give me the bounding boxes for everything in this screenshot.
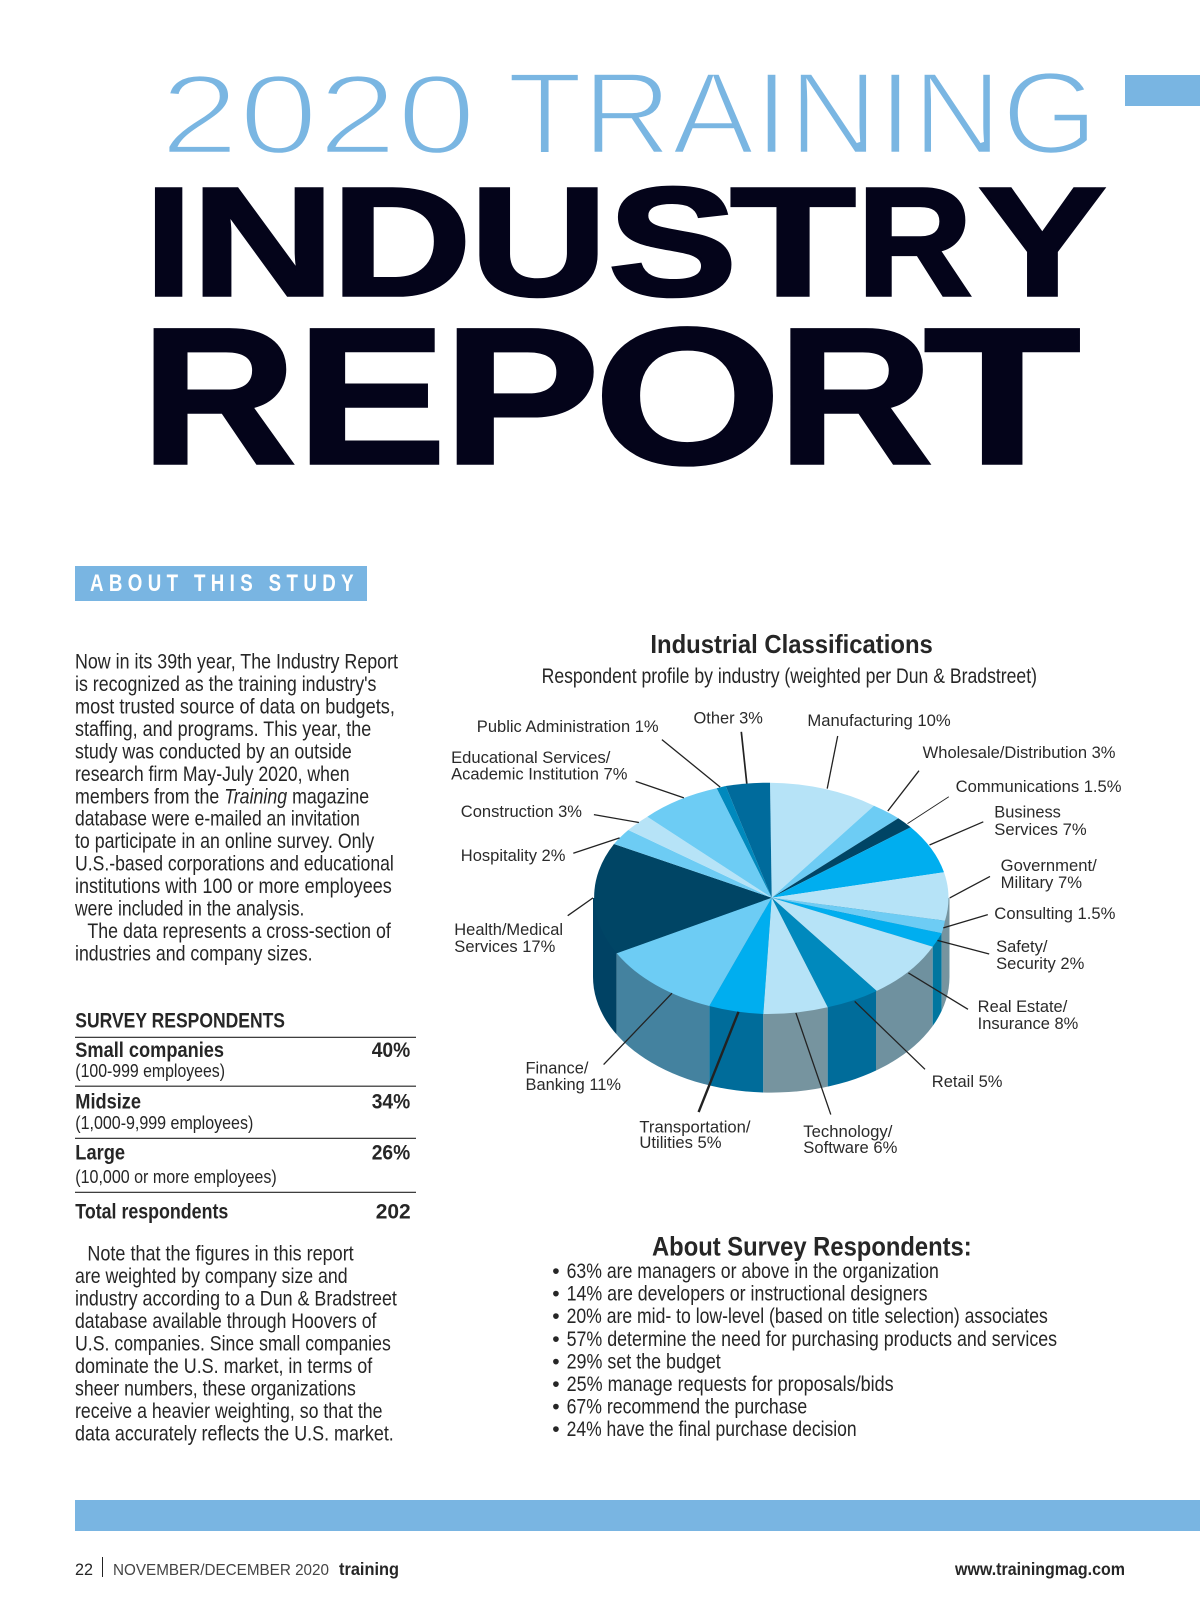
footer: page number, date and magazine name: 22 xyxy=(75,1560,93,1579)
title: Report: O xyxy=(594,288,782,506)
footer: page number, date and magazine name: training xyxy=(339,1559,399,1579)
slice labels: Communications 1.5% xyxy=(956,778,1122,796)
text block: study introduction xyxy=(74,650,398,966)
heading: About Survey Respondents: About Survey Respondents: xyxy=(652,1232,972,1262)
title: Report: R xyxy=(777,288,933,506)
slice labels: Educational Services/ xyxy=(451,749,611,767)
slice labels: Government/ xyxy=(1001,857,1097,875)
text block: study introduction: most trusted source of data on budgets, xyxy=(75,695,395,718)
bullet list: respondent facts: 57% determine the need for purchasing products and services xyxy=(567,1328,1057,1351)
slice labels: Finance/ xyxy=(526,1060,589,1078)
table heading: SURVEY RESPONDENTS xyxy=(75,1010,285,1032)
title: Report: R xyxy=(140,288,297,506)
title: Report: P xyxy=(442,288,600,506)
bullet list: respondent facts: • xyxy=(552,1283,560,1306)
footer: website: www.trainingmag.com xyxy=(954,1559,1125,1579)
slice labels: Banking 11% xyxy=(526,1076,621,1094)
title: Industry: Y xyxy=(978,154,1107,328)
slice labels: Construction 3% xyxy=(461,803,582,821)
row: large: (10,000 or more employees) xyxy=(75,1167,277,1187)
text block: weighting note: dominate the U.S. market, in terms of xyxy=(75,1355,372,1378)
row: midsize xyxy=(75,1090,410,1133)
section label: About This Study xyxy=(75,566,367,601)
text block: weighting note: data accurately reflects the U.S. market. xyxy=(75,1422,394,1445)
text block: weighting note: Note that the figures in this report xyxy=(87,1243,354,1266)
pie side wall xyxy=(590,890,952,1100)
text block: study introduction: database were e-mailed an invitation xyxy=(75,808,360,831)
title: Industry: U xyxy=(469,154,608,328)
text block: study introduction: members from the Training magazine xyxy=(75,785,369,808)
row: small companies: 40% xyxy=(372,1039,410,1062)
row: small companies: (100-999 employees) xyxy=(75,1061,225,1081)
text block: study introduction: were included in the analysis. xyxy=(74,898,304,921)
bullet list: respondent facts: • xyxy=(552,1328,560,1351)
bullet list: respondent facts: 63% are managers or above in the organization xyxy=(567,1260,939,1283)
title: Industry: N xyxy=(191,154,335,328)
text block: study introduction: staffing, and programs. This year, the xyxy=(75,718,371,741)
chart heading: Industrial Classifications: Industrial Classifications xyxy=(650,629,933,659)
row: midsize: (1,000-9,999 employees) xyxy=(75,1113,253,1133)
title: 2020 Training xyxy=(160,48,1098,178)
bullet list: respondent facts: • xyxy=(552,1396,560,1419)
text block: study introduction: study was conducted by an outside xyxy=(75,740,352,763)
bullet list: respondent facts: • xyxy=(552,1373,560,1396)
text block: weighting note: database available through Hoovers of xyxy=(75,1310,377,1333)
slice labels: Insurance 8% xyxy=(978,1015,1078,1033)
leader lines xyxy=(568,732,990,1115)
row: small companies xyxy=(75,1039,410,1081)
text block: weighting note: are weighted by company size and xyxy=(75,1265,348,1288)
bullet list: respondent facts: 25% manage requests for proposals/bids xyxy=(567,1373,894,1396)
bullet list: respondent facts: 29% set the budget xyxy=(567,1350,721,1373)
row: midsize: Midsize xyxy=(75,1090,141,1114)
title: Report: T xyxy=(923,288,1081,506)
slice labels: Services 7% xyxy=(994,821,1087,839)
text block: weighting note xyxy=(75,1243,397,1445)
title: Industry: R xyxy=(856,154,973,328)
bullet list: respondent facts: • xyxy=(552,1350,560,1373)
text block: study introduction: is recognized as the training industry's xyxy=(75,673,376,696)
chart: 3D pie of industrial classifications xyxy=(451,710,1122,1157)
table: survey respondents xyxy=(75,1010,416,1224)
title: Industry: I xyxy=(145,154,192,328)
bullet list: respondent facts: • xyxy=(552,1418,560,1441)
slice labels: Hospitality 2% xyxy=(461,847,565,865)
title: 2020 Training: 2020 xyxy=(160,52,476,178)
text block: weighting note: receive a heavier weighting, so that the xyxy=(75,1400,382,1423)
bullet list: respondent facts: • xyxy=(552,1305,560,1328)
bullet list: respondent facts: • xyxy=(552,1260,560,1283)
bullet list: respondent facts: 20% are mid- to low-level (based on title selection) associates xyxy=(567,1305,1048,1328)
slice labels: Public Administration 1% xyxy=(477,718,659,736)
slice labels: Utilities 5% xyxy=(639,1134,722,1152)
text block: study introduction: research firm May-July 2020, when xyxy=(75,763,350,786)
chart subtitle: Respondent profile by industry (weighted per Dun & Bradstreet) xyxy=(542,665,1037,688)
row: large: 26% xyxy=(372,1142,410,1164)
text block: study introduction: industries and company sizes. xyxy=(75,942,313,966)
slice labels: Military 7% xyxy=(1001,874,1082,892)
slice labels: Services 17% xyxy=(454,938,555,956)
slice labels: Academic Institution 7% xyxy=(451,766,627,784)
slice labels: Transportation/ xyxy=(639,1118,751,1136)
text block: weighting note: industry according to a Dun & Bradstreet xyxy=(75,1288,397,1310)
row: midsize: 34% xyxy=(372,1090,410,1114)
bullet list: respondent facts: 14% are developers or instructional designers xyxy=(567,1283,928,1306)
slice labels: Technology/ xyxy=(803,1123,893,1141)
row: large: Large xyxy=(75,1142,125,1164)
text block: study introduction: institutions with 100 or more employees xyxy=(75,875,392,898)
slice labels: Business xyxy=(994,804,1061,822)
text block: study introduction: Now in its 39th year, The Industry Report xyxy=(75,650,398,674)
slice labels: Software 6% xyxy=(803,1139,897,1157)
text block: study introduction: The data represents a cross-section of xyxy=(87,920,391,943)
slice labels: Other 3% xyxy=(694,710,763,728)
footer: page number, date and magazine name: NOVEMBER/DECEMBER 2020 xyxy=(113,1562,329,1579)
slice labels: Security 2% xyxy=(996,955,1084,973)
slice labels: Safety/ xyxy=(996,938,1048,956)
text block: study introduction: U.S.-based corporations and educational xyxy=(75,853,394,876)
section label: About This Study: ABOUT THIS STUDY xyxy=(90,570,354,597)
footer: page number, date and magazine name xyxy=(75,1557,399,1579)
text block: weighting note: U.S. companies. Since small companies xyxy=(75,1332,391,1355)
slice labels: Retail 5% xyxy=(932,1073,1002,1091)
text block: study introduction: to participate in an online survey. Only xyxy=(75,830,375,853)
title: Industry: T xyxy=(730,154,856,328)
title: Industry: S xyxy=(608,154,738,328)
bullet list: respondent facts: 67% recommend the purchase xyxy=(567,1396,807,1419)
title: 2020 Training: TRAINING xyxy=(507,48,1098,178)
row: small companies: Small companies xyxy=(75,1039,224,1062)
decorative tab: top right xyxy=(1125,75,1200,106)
row: large xyxy=(75,1142,410,1187)
slice labels: Real Estate/ xyxy=(978,998,1068,1016)
slice labels: Health/Medical xyxy=(454,921,563,939)
slice labels: Consulting 1.5% xyxy=(994,905,1116,923)
slice labels: Manufacturing 10% xyxy=(807,712,951,730)
row: total respondents: Total respondents xyxy=(75,1200,228,1224)
slice labels xyxy=(451,710,1122,1157)
slice labels: Wholesale/Distribution 3% xyxy=(923,744,1116,762)
bullet list: respondent facts: 24% have the final purchase decision xyxy=(567,1418,857,1441)
pie top surface xyxy=(594,783,948,1014)
row: total respondents xyxy=(75,1200,411,1224)
title: Report: E xyxy=(296,288,447,506)
footer band xyxy=(75,1500,1200,1531)
text block: weighting note: sheer numbers, these organizations xyxy=(75,1377,356,1400)
row: total respondents: 202 xyxy=(376,1200,411,1224)
bullet list: respondent facts xyxy=(552,1260,1057,1441)
title: Industry: D xyxy=(331,154,472,328)
